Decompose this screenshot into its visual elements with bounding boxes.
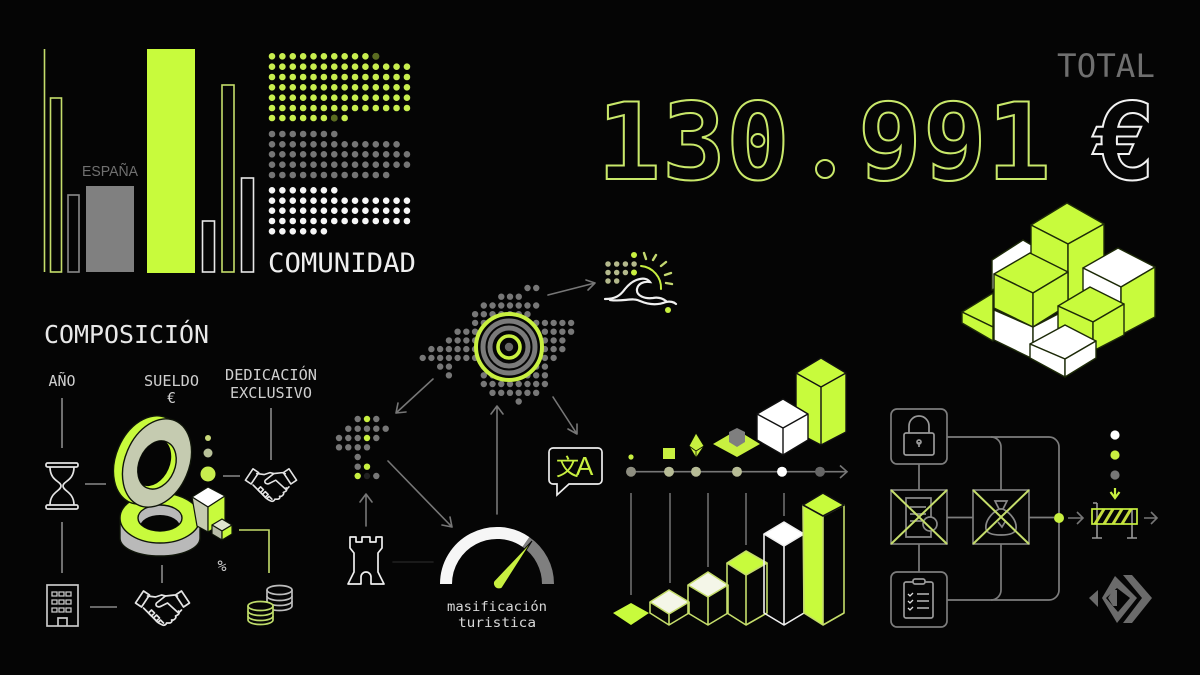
- flow arrows: [360, 280, 595, 562]
- arrow: [1144, 512, 1157, 524]
- icon: translate bubble: A: [576, 451, 594, 481]
- large cube: [192, 487, 225, 532]
- gauge: [446, 533, 548, 589]
- icon: building: [47, 585, 78, 626]
- icon: sun and wave: [605, 252, 676, 313]
- label: sueldo: SUELDO: [144, 372, 199, 390]
- lower ring: [120, 493, 200, 556]
- dot matrix: white: [272, 190, 408, 231]
- box: clipboard: [891, 572, 947, 627]
- label: euro: €: [167, 389, 176, 407]
- heading: comunidad: COMUNIDAD: [268, 248, 416, 279]
- label: percent: %: [217, 557, 227, 575]
- label: turistica: turistica: [458, 615, 536, 631]
- logo: [1089, 575, 1152, 623]
- illustration: rings and cubes: [112, 415, 232, 556]
- upper ring: [112, 415, 192, 508]
- timeline axis: [626, 466, 847, 478]
- icon: handshake top: [245, 469, 297, 501]
- heading: composición: COMPOSICIÓN: [44, 319, 209, 349]
- label: dedicación: DEDICACIÓN: [225, 365, 317, 384]
- label: España: ESPAÑA: [82, 163, 138, 180]
- dot map: small: [336, 416, 389, 479]
- label: exclusivo: EXCLUSIVO: [230, 384, 312, 402]
- stepped isometric bars: [613, 493, 844, 625]
- dot map: large: [423, 288, 572, 402]
- label: total: TOTAL: [1057, 47, 1155, 85]
- box: crossed money bag: [973, 490, 1029, 544]
- dot matrix: lime: [272, 53, 408, 121]
- box: crossed document: [891, 490, 947, 544]
- box: lock: [891, 409, 947, 464]
- icon: translate bubble: [549, 448, 602, 495]
- icon: translate bubble: 文: [556, 455, 579, 481]
- junction dot: [1054, 513, 1064, 523]
- big number: 130.991: [597, 81, 1051, 204]
- timeline growth icons: [628, 358, 846, 460]
- timeline drop lines: [631, 493, 784, 595]
- flow connectors: [919, 437, 1059, 600]
- target rings: [476, 314, 542, 380]
- icon: hourglass: [46, 463, 78, 509]
- icon: coin stacks: [248, 586, 292, 625]
- small cube: [212, 519, 232, 540]
- label: masificación: masificación: [447, 599, 547, 615]
- dots: [205, 435, 211, 441]
- icon: handshake bottom: [136, 591, 190, 625]
- icon: barrier: [1092, 503, 1137, 538]
- icon: tower: [348, 537, 384, 584]
- arrow: [1068, 512, 1083, 524]
- dot matrix: grey: [272, 134, 408, 175]
- bar chart: comunidad vs España: [44, 49, 254, 273]
- euro sign: €: [1092, 81, 1156, 204]
- status dots: [1110, 430, 1120, 498]
- isometric cube cluster: [962, 203, 1155, 377]
- composition connectors: [62, 398, 271, 607]
- label: año: AÑO: [48, 371, 76, 390]
